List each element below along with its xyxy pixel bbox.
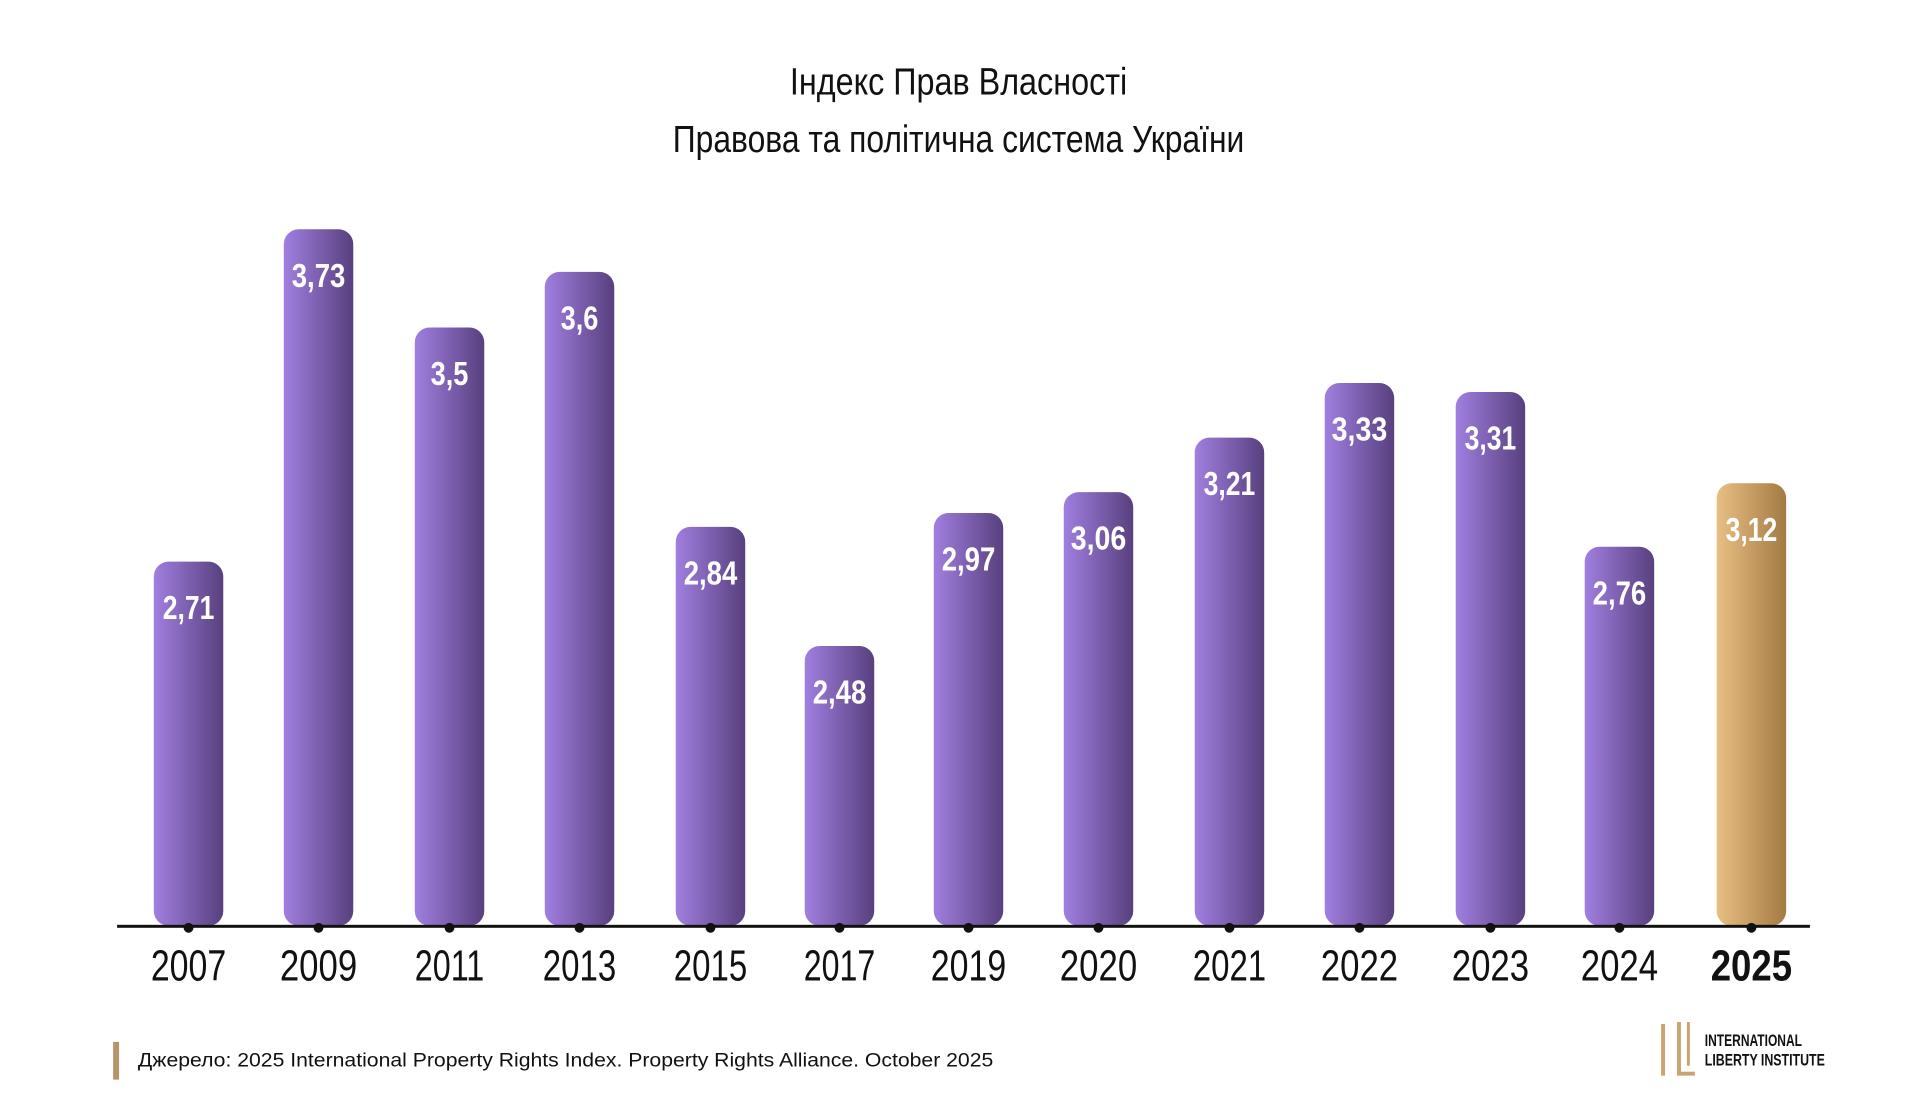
- title: Індекс Прав Власності: [790, 60, 1127, 102]
- year labels: 2009: [280, 941, 357, 990]
- logo: LIBERTY INSTITUTE: [1705, 1051, 1825, 1070]
- bar 2007: 2,71: [163, 589, 214, 627]
- source note: Джерело: 2025 International Property Rights Index. Property Rights Alliance. October 2025: [138, 1050, 993, 1072]
- bar 2013: 3,6: [561, 299, 598, 337]
- year labels: [151, 941, 1792, 990]
- bar 2009: 3,73: [292, 257, 345, 295]
- bar 2024: [1585, 547, 1654, 926]
- title: [673, 60, 1244, 160]
- bar 2020: 3,06: [1071, 520, 1126, 558]
- bar 2025: [1717, 483, 1786, 926]
- bar 2017: [805, 646, 874, 926]
- bar 2015: [676, 527, 745, 926]
- year labels: 2024: [1581, 941, 1658, 990]
- bar 2009: [284, 229, 353, 926]
- bar 2024: 2,76: [1593, 574, 1646, 612]
- bar 2011: [415, 327, 484, 926]
- bar 2019: 2,97: [942, 541, 995, 579]
- bar 2021: 3,21: [1204, 465, 1255, 503]
- year labels: 2021: [1193, 941, 1266, 990]
- logo: [1661, 1022, 1825, 1076]
- year labels: 2020: [1060, 941, 1137, 990]
- year labels: 2013: [543, 941, 616, 990]
- bar 2025: 3,12: [1726, 511, 1777, 549]
- bar 2020: [1064, 492, 1133, 926]
- title: Правова та політична система України: [673, 118, 1244, 160]
- bar 2011: 3,5: [431, 355, 468, 393]
- year labels: 2025: [1711, 941, 1792, 990]
- bar 2023: 3,31: [1465, 420, 1516, 458]
- year labels: 2007: [151, 941, 226, 990]
- year labels: 2023: [1452, 941, 1529, 990]
- year labels: 2011: [415, 941, 484, 990]
- bar chart: [154, 229, 1786, 926]
- year labels: 2017: [804, 941, 875, 990]
- bar 2021: [1195, 438, 1264, 926]
- bar 2023: [1456, 392, 1525, 926]
- year labels: 2022: [1321, 941, 1398, 990]
- year labels: 2015: [674, 941, 747, 990]
- bar 2013: [545, 272, 614, 926]
- year labels: 2019: [931, 941, 1006, 990]
- bar 2022: 3,33: [1332, 411, 1387, 449]
- bar 2015: 2,84: [684, 554, 737, 592]
- logo: INTERNATIONAL: [1705, 1031, 1802, 1050]
- bar 2019: [934, 513, 1003, 926]
- bar 2017: 2,48: [813, 674, 866, 712]
- x axis: [117, 923, 1810, 933]
- source note: [113, 1042, 993, 1080]
- bar 2022: [1325, 383, 1394, 926]
- bar 2007: [154, 562, 223, 926]
